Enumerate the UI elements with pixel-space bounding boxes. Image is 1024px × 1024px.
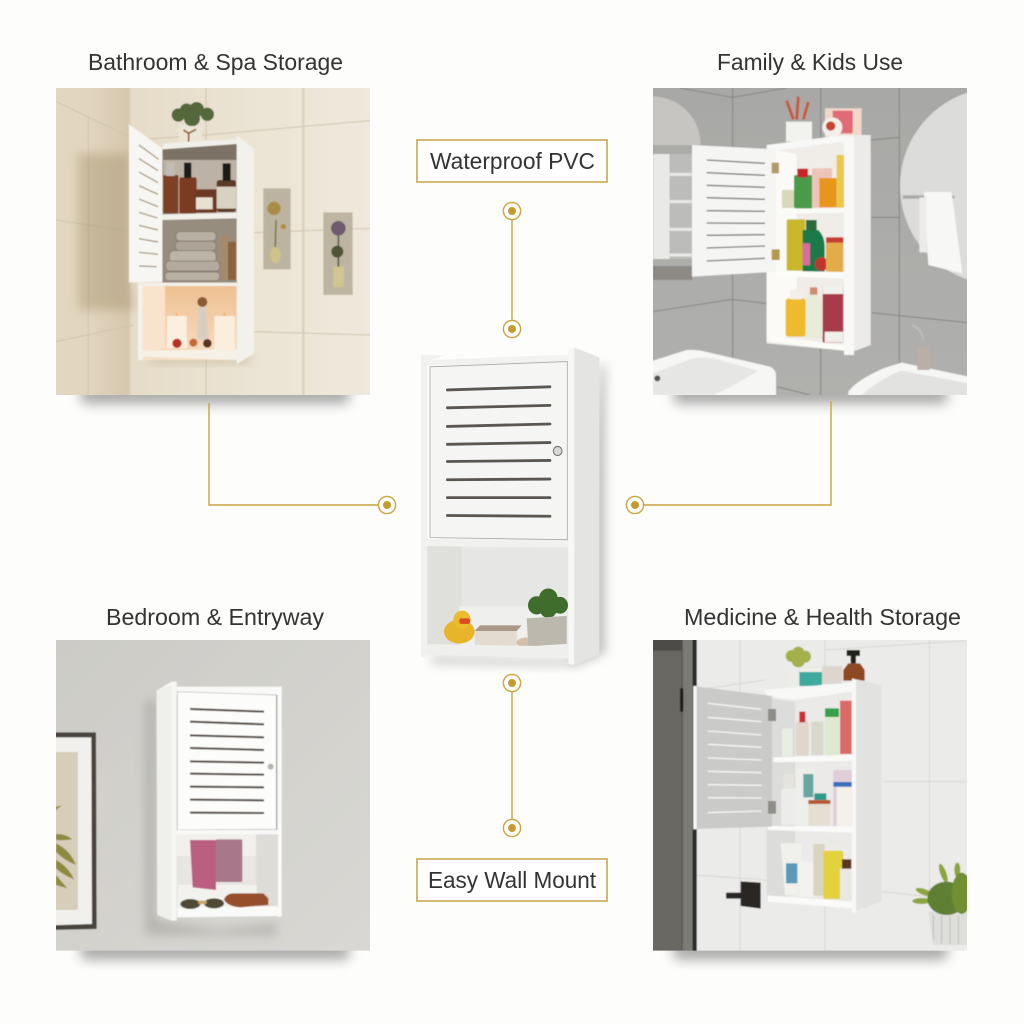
framed picture [56,732,98,930]
upper shelf bottles [163,163,236,213]
lower shelf items [786,286,843,343]
shell [516,637,541,648]
top shelf items [782,701,852,757]
upper shelf items [782,155,844,208]
open louvered door [692,145,780,277]
top items [786,97,862,142]
tall bottles [221,235,236,280]
wall art left [263,188,291,269]
left side [421,355,445,658]
open lower compartment [176,856,256,908]
panel: bathroom and spa photo [50,80,377,403]
small mirror left [653,96,701,280]
bottom shelf [427,644,568,658]
upper shelf [796,208,844,214]
label box: Easy Wall Mount [417,859,607,901]
middle shelf items [787,219,843,273]
cabinet shadow [428,362,606,666]
center product cabinet [421,347,606,666]
small box [475,625,522,646]
connector: bottom [503,674,521,837]
cabinet interior [765,685,852,908]
connector: left [209,403,396,514]
plant and top items [786,647,865,687]
shelf one [773,755,852,762]
open door grey underside [693,686,776,829]
plant pot on top [172,102,214,143]
heading: Medicine & Health Storage: Medicine & Health Storage [684,604,961,630]
cabinet side panel [237,135,254,364]
potted plant [912,863,977,945]
potted plant [527,588,568,646]
heading: Family & Kids Use: Family & Kids Use [717,49,903,75]
shelf two [768,826,852,833]
connector: top [503,202,521,338]
cabinet interior [162,143,237,285]
door handle [726,881,761,909]
door with slots [177,692,277,830]
wallet [224,893,268,907]
panel shadow: bathroom [80,384,350,404]
candles and figurine [167,297,235,350]
cabinet body [157,682,177,921]
bottom shelf items [781,843,852,901]
lower shelf [796,270,844,278]
label box: Easy Wall Mount: Easy Wall Mount [428,867,597,893]
right sink and tap [848,324,967,395]
round mirror with towel [900,92,967,280]
scarf [190,839,242,890]
left sink [653,349,777,395]
connector: right [626,401,831,514]
cabinet side panel [852,678,881,912]
bottom shelf [770,338,844,350]
panel shadow: family [673,384,948,404]
panel shadow: medicine [673,940,948,960]
panel: medicine and health photo [650,633,977,957]
panel: bedroom and entryway photo [50,633,377,957]
label box: Waterproof PVC [417,140,607,182]
cabinet interior [767,139,844,351]
panel: family and kids photo [653,88,967,395]
sunglasses [180,898,224,909]
heading: Bedroom & Entryway: Bedroom & Entryway [106,604,325,630]
label box: Waterproof PVC: Waterproof PVC [430,148,595,174]
open louvered door [129,124,162,282]
lower shelf glow [138,283,237,360]
mid shelf [162,213,237,220]
shelf edge [177,830,277,834]
door with slots and knob [430,362,567,540]
lower compartment [427,546,568,646]
faucet [666,316,698,357]
cabinet side panel [844,135,871,355]
wall art right [323,212,353,295]
rubber duck [444,611,475,644]
bottom shelf [767,895,852,908]
towels stack [165,232,220,281]
middle shelf items [781,768,852,827]
right side panel [574,347,599,665]
heading: Bathroom & Spa Storage: Bathroom & Spa Storage [88,49,343,75]
right front edge [568,347,574,665]
door frame [650,633,697,957]
shelf between door and compartment [427,539,568,547]
panel shadow: bedroom [80,940,350,960]
top rail [427,355,568,366]
